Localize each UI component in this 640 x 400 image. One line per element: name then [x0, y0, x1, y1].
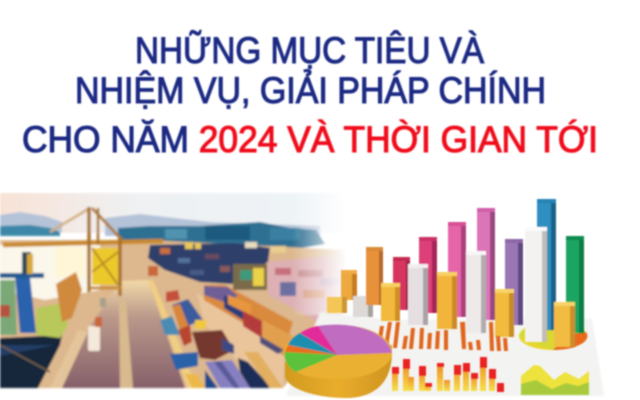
3D bar chart — [327, 199, 584, 347]
ship bridge tower — [15, 277, 36, 333]
bar: orange small — [341, 270, 357, 300]
bar: yellow small — [327, 297, 347, 313]
bar: white 1 — [466, 251, 486, 333]
ship deck colours — [0, 280, 17, 335]
bar: blue — [537, 199, 556, 330]
slice: purple — [318, 325, 392, 355]
red caps — [392, 357, 504, 392]
slice: orange — [285, 345, 337, 355]
pie chart — [284, 325, 392, 398]
bar: crimson — [393, 257, 410, 310]
bar: pink — [448, 222, 466, 317]
title — [22, 30, 598, 160]
fade to white — [292, 190, 347, 315]
distant hills — [0, 212, 320, 236]
bar: yellow 3 — [495, 289, 514, 337]
chart paper — [286, 312, 604, 396]
blue block — [170, 352, 198, 370]
peach ground strip — [197, 293, 285, 388]
crane — [3, 207, 163, 296]
yellow bodies — [392, 362, 495, 391]
area chart — [521, 365, 589, 395]
crane yellow panel — [92, 248, 118, 285]
crane boom — [3, 241, 163, 245]
donut under bars — [519, 322, 587, 350]
center containers — [166, 290, 180, 302]
yard ground — [0, 240, 345, 388]
port photo — [0, 190, 347, 388]
pie side — [285, 345, 392, 398]
bar: yellow 4 — [554, 302, 575, 347]
mid dark block — [192, 330, 234, 360]
bar: purple — [505, 239, 523, 325]
sky — [0, 193, 345, 233]
bottom stacks — [205, 360, 250, 388]
title: NHỮNG MỤC TIÊU VÀ — [135, 30, 484, 71]
far container yard — [148, 243, 270, 284]
slice: green — [285, 352, 337, 372]
slice: gold — [296, 353, 392, 379]
gantry crane far — [233, 264, 267, 290]
tree line — [0, 222, 325, 250]
bar: orange tall — [366, 247, 383, 305]
bar: white 2 — [525, 227, 547, 342]
bright water behind crane — [0, 245, 100, 300]
slice: magenta — [300, 326, 337, 355]
faded far stacks — [268, 256, 345, 322]
truck on road — [88, 326, 100, 351]
bar: magenta — [419, 237, 437, 313]
bar: orchid — [477, 208, 495, 320]
orange mini bars — [377, 322, 508, 351]
bar: silver — [408, 264, 428, 325]
road — [50, 280, 185, 388]
bar: yellow 2 — [437, 272, 457, 329]
title: NHIỆM VỤ, GIẢI PHÁP CHÍNH — [75, 70, 546, 111]
right container row — [204, 285, 293, 348]
bar: green — [566, 236, 584, 333]
pie top base — [284, 325, 392, 379]
bar: grey small — [353, 296, 373, 317]
title: CHO NĂM 2024 VÀ THỜI GIAN TỚI — [22, 119, 598, 160]
ship hull — [0, 335, 62, 388]
slice: teal — [288, 333, 337, 355]
bar: yellow 1 — [381, 283, 400, 321]
red and yellow mini bars — [392, 357, 504, 392]
